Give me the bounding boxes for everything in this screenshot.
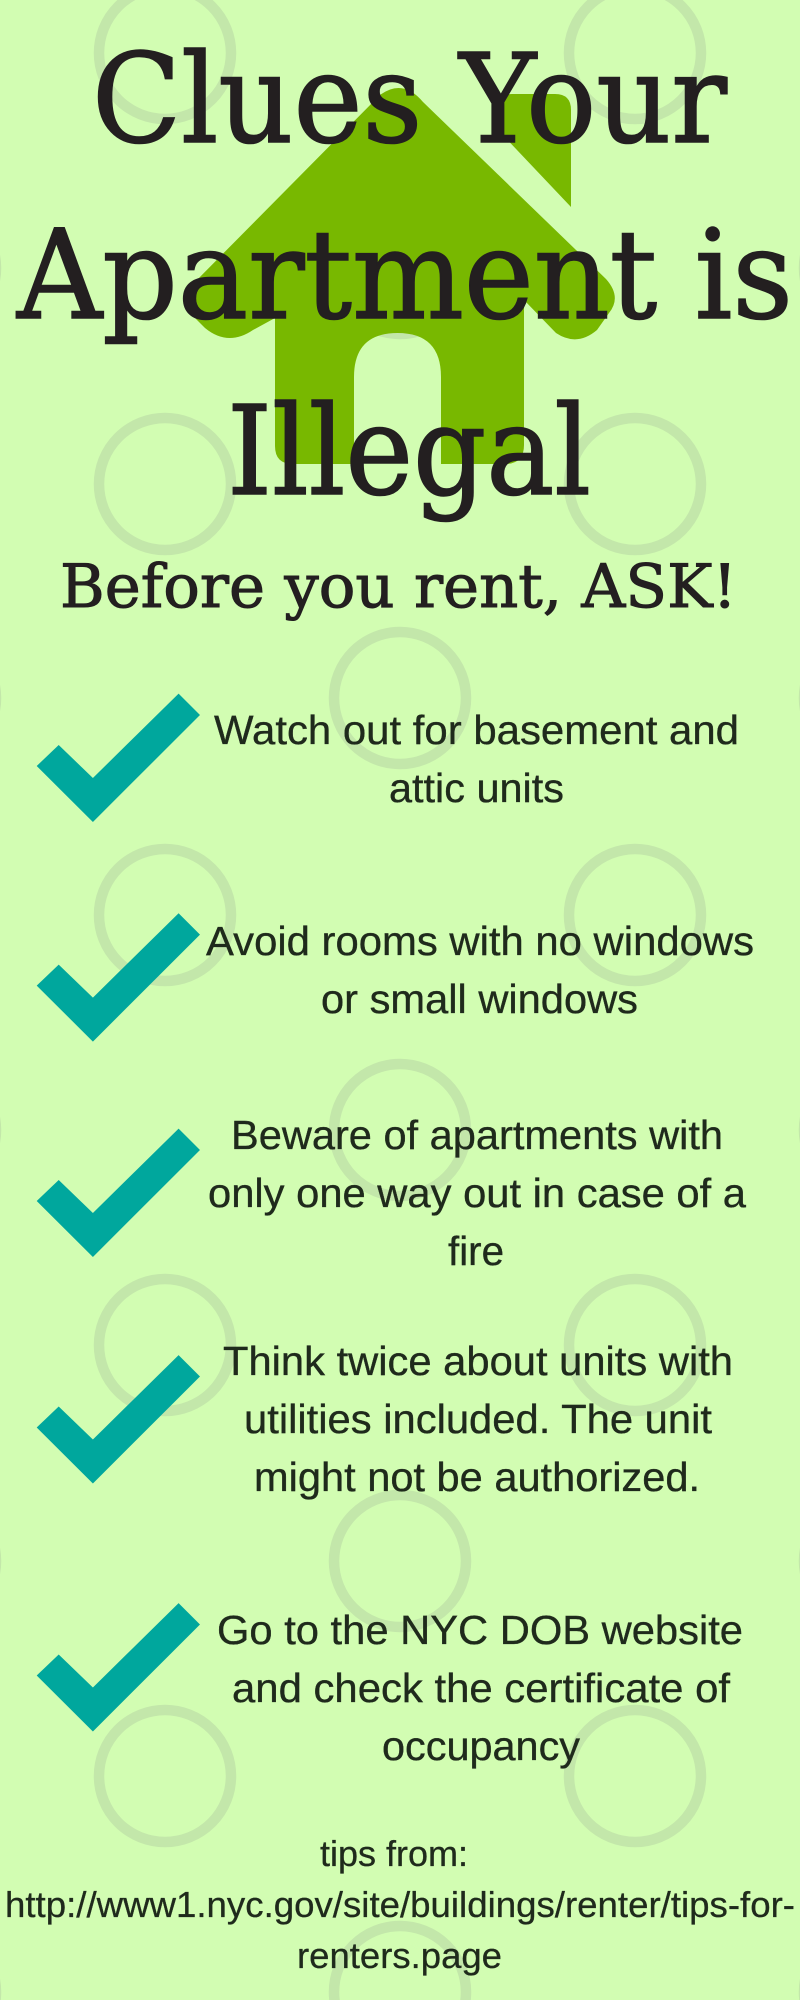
tip 5 text: Go to the NYC DOB website bbox=[217, 1607, 743, 1653]
tip 2: windows bbox=[37, 913, 754, 1042]
source credit: renters.page bbox=[297, 1935, 502, 1976]
tip 4 text: Think twice about units with bbox=[223, 1338, 733, 1384]
icon: check mark 2 bbox=[37, 913, 200, 1042]
tip 3 text: only one way out in case of a bbox=[208, 1170, 746, 1216]
subtitle: Before you rent, ASK! bbox=[60, 552, 737, 622]
tip 5 text: occupancy bbox=[382, 1723, 581, 1769]
source credit: http://www1.nyc.gov/site/buildings/renter/tips-for- bbox=[5, 1884, 795, 1925]
source credit: tips from: bbox=[320, 1833, 468, 1874]
icon: check mark 3 bbox=[37, 1129, 200, 1257]
tip 3: one way out bbox=[37, 1112, 746, 1274]
tip 1 text: Watch out for basement and bbox=[214, 707, 739, 753]
tip 4 text: might not be authorized. bbox=[254, 1454, 700, 1500]
tip 5 text: and check the certificate of bbox=[232, 1665, 731, 1711]
tip 2 text: or small windows bbox=[321, 976, 638, 1022]
tip 3 text: fire bbox=[448, 1228, 504, 1274]
title bbox=[16, 28, 793, 524]
tip 2 text: Avoid rooms with no windows bbox=[206, 918, 754, 964]
tip 1: basement and attic units bbox=[37, 694, 739, 822]
icon: check mark 4 bbox=[37, 1355, 200, 1484]
tip 1 text: attic units bbox=[389, 765, 564, 811]
tip 3 text: Beware of apartments with bbox=[231, 1112, 723, 1158]
title: Illegal bbox=[227, 380, 591, 524]
tip 5: certificate of occupancy bbox=[37, 1603, 743, 1769]
title: Clues Your bbox=[92, 28, 728, 172]
icon: check mark 1 bbox=[37, 694, 200, 822]
icon: house bbox=[186, 88, 615, 464]
icon: check mark 5 bbox=[37, 1603, 200, 1732]
tip 4 text: utilities included. The unit bbox=[244, 1396, 713, 1442]
tip 4: utilities included bbox=[37, 1338, 733, 1500]
